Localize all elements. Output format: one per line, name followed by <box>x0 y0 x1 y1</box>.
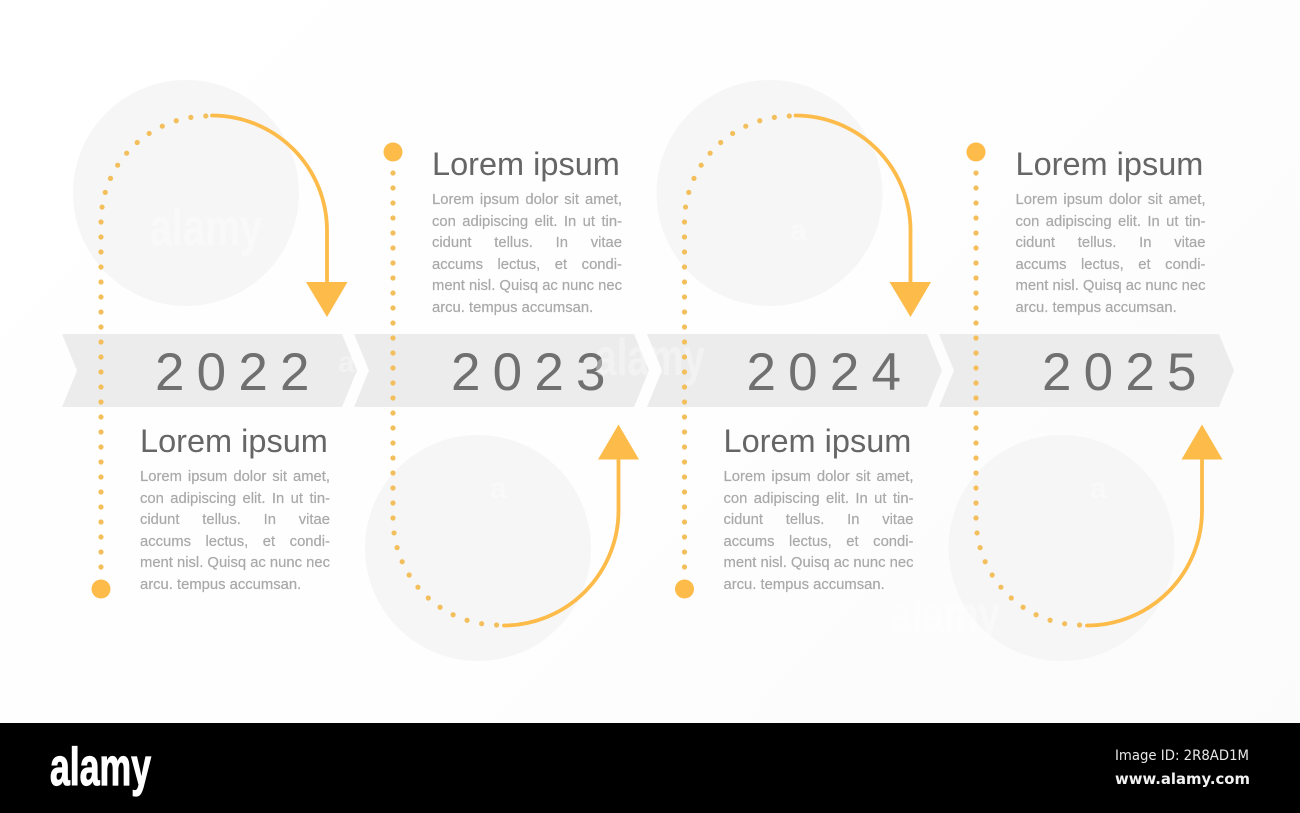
text block 2025: cidunt tellus. In vitae <box>1016 235 1206 251</box>
arrowhead <box>1182 424 1222 460</box>
text block 2023: accums lectus, et condi- <box>432 256 622 272</box>
watermark marks: alamy <box>150 199 262 257</box>
chevron 2022 <box>62 334 357 407</box>
text block 2024: con adipiscing elit. In ut tin- <box>724 490 914 506</box>
background circle 2022 <box>73 80 299 306</box>
watermark marks: alamy <box>890 586 1000 644</box>
text block 2024: Lorem ipsum <box>724 423 911 459</box>
text block 2022: ment nisl. Quisq ac nunc nec <box>140 555 330 571</box>
text block 2025: con adipiscing elit. In ut tin- <box>1016 214 1206 230</box>
background circle 2025 <box>948 435 1174 661</box>
dotted path <box>393 173 498 625</box>
chevron 2024 <box>647 334 942 407</box>
text block 2022: arcu. tempus accumsan. <box>140 576 301 592</box>
text block 2025: arcu. tempus accumsan. <box>1016 300 1177 316</box>
text block 2023: Lorem ipsum <box>432 146 620 182</box>
chevron 2024: 2024 <box>746 343 913 402</box>
text block 2024: ment nisl. Quisq ac nunc nec <box>724 555 914 571</box>
solid curve <box>1087 456 1202 626</box>
watermark marks <box>150 199 1107 644</box>
text block 2022 <box>140 423 330 592</box>
text block 2025: ment nisl. Quisq ac nunc nec <box>1016 278 1206 294</box>
dotted path <box>976 173 1081 625</box>
alamy logo: alamy <box>50 738 151 797</box>
text block 2025: Lorem ipsum <box>1016 146 1203 182</box>
text block 2024 <box>724 423 914 592</box>
text block 2022: con adipiscing elit. In ut tin- <box>140 490 330 506</box>
connector 2024: marker, dotted line, solid arrow <box>675 116 931 598</box>
start marker <box>675 580 694 598</box>
watermark marks: alamy <box>595 329 705 387</box>
text block 2023: Lorem ipsum dolor sit amet, <box>432 192 622 208</box>
connector 2022: marker, dotted line, solid arrow <box>92 116 348 598</box>
chevron 2025 <box>939 334 1234 407</box>
text block 2023: con adipiscing elit. In ut tin- <box>432 214 622 230</box>
solid curve <box>504 456 619 626</box>
text block 2022: accums lectus, et condi- <box>140 534 330 550</box>
chevron 2023 <box>354 334 649 407</box>
solid curve <box>212 116 327 285</box>
start marker <box>966 142 986 162</box>
arrowhead <box>306 282 348 317</box>
text block 2024: accums lectus, et condi- <box>724 534 914 550</box>
background circle 2023 <box>365 435 591 661</box>
chevron 2023: 2023 <box>451 343 618 402</box>
text block 2025: Lorem ipsum dolor sit amet, <box>1016 192 1206 208</box>
text block 2023: cidunt tellus. In vitae <box>432 235 622 251</box>
website: www.alamy.com <box>1115 770 1250 788</box>
start marker <box>384 142 402 162</box>
text block 2022: cidunt tellus. In vitae <box>140 512 330 528</box>
text block 2022: Lorem ipsum dolor sit amet, <box>140 469 330 485</box>
chevron 2022: 2022 <box>155 343 322 402</box>
start marker <box>92 580 110 598</box>
text block 2024: arcu. tempus accumsan. <box>724 576 885 592</box>
text block 2025 <box>1016 146 1206 316</box>
connector 2023: marker, dotted line, solid arrow <box>384 142 639 626</box>
chevron band with years <box>62 334 1234 407</box>
chevron 2025: 2025 <box>1042 343 1209 402</box>
background circle 2024 <box>656 80 882 306</box>
image id: Image ID: 2R8AD1M <box>1115 748 1249 764</box>
watermark marks: a <box>338 346 355 379</box>
footer bar <box>0 723 1300 813</box>
dotted path <box>101 116 208 567</box>
watermark marks: a <box>1090 472 1107 505</box>
text block 2022: Lorem ipsum <box>140 423 328 459</box>
text block 2023: ment nisl. Quisq ac nunc nec <box>432 278 622 294</box>
watermark marks: a <box>490 472 507 505</box>
text block 2025: accums lectus, et condi- <box>1016 256 1206 272</box>
arrowhead <box>890 282 931 317</box>
connector 2025: marker, dotted line, solid arrow <box>966 142 1222 626</box>
text block 2024: cidunt tellus. In vitae <box>724 512 914 528</box>
arrowhead <box>598 424 639 460</box>
text block 2023: arcu. tempus accumsan. <box>432 300 593 316</box>
watermark marks: a <box>790 214 807 247</box>
text block 2023 <box>432 146 622 316</box>
text block 2024: Lorem ipsum dolor sit amet, <box>724 469 914 485</box>
dotted path <box>684 116 792 567</box>
solid curve <box>796 116 910 285</box>
